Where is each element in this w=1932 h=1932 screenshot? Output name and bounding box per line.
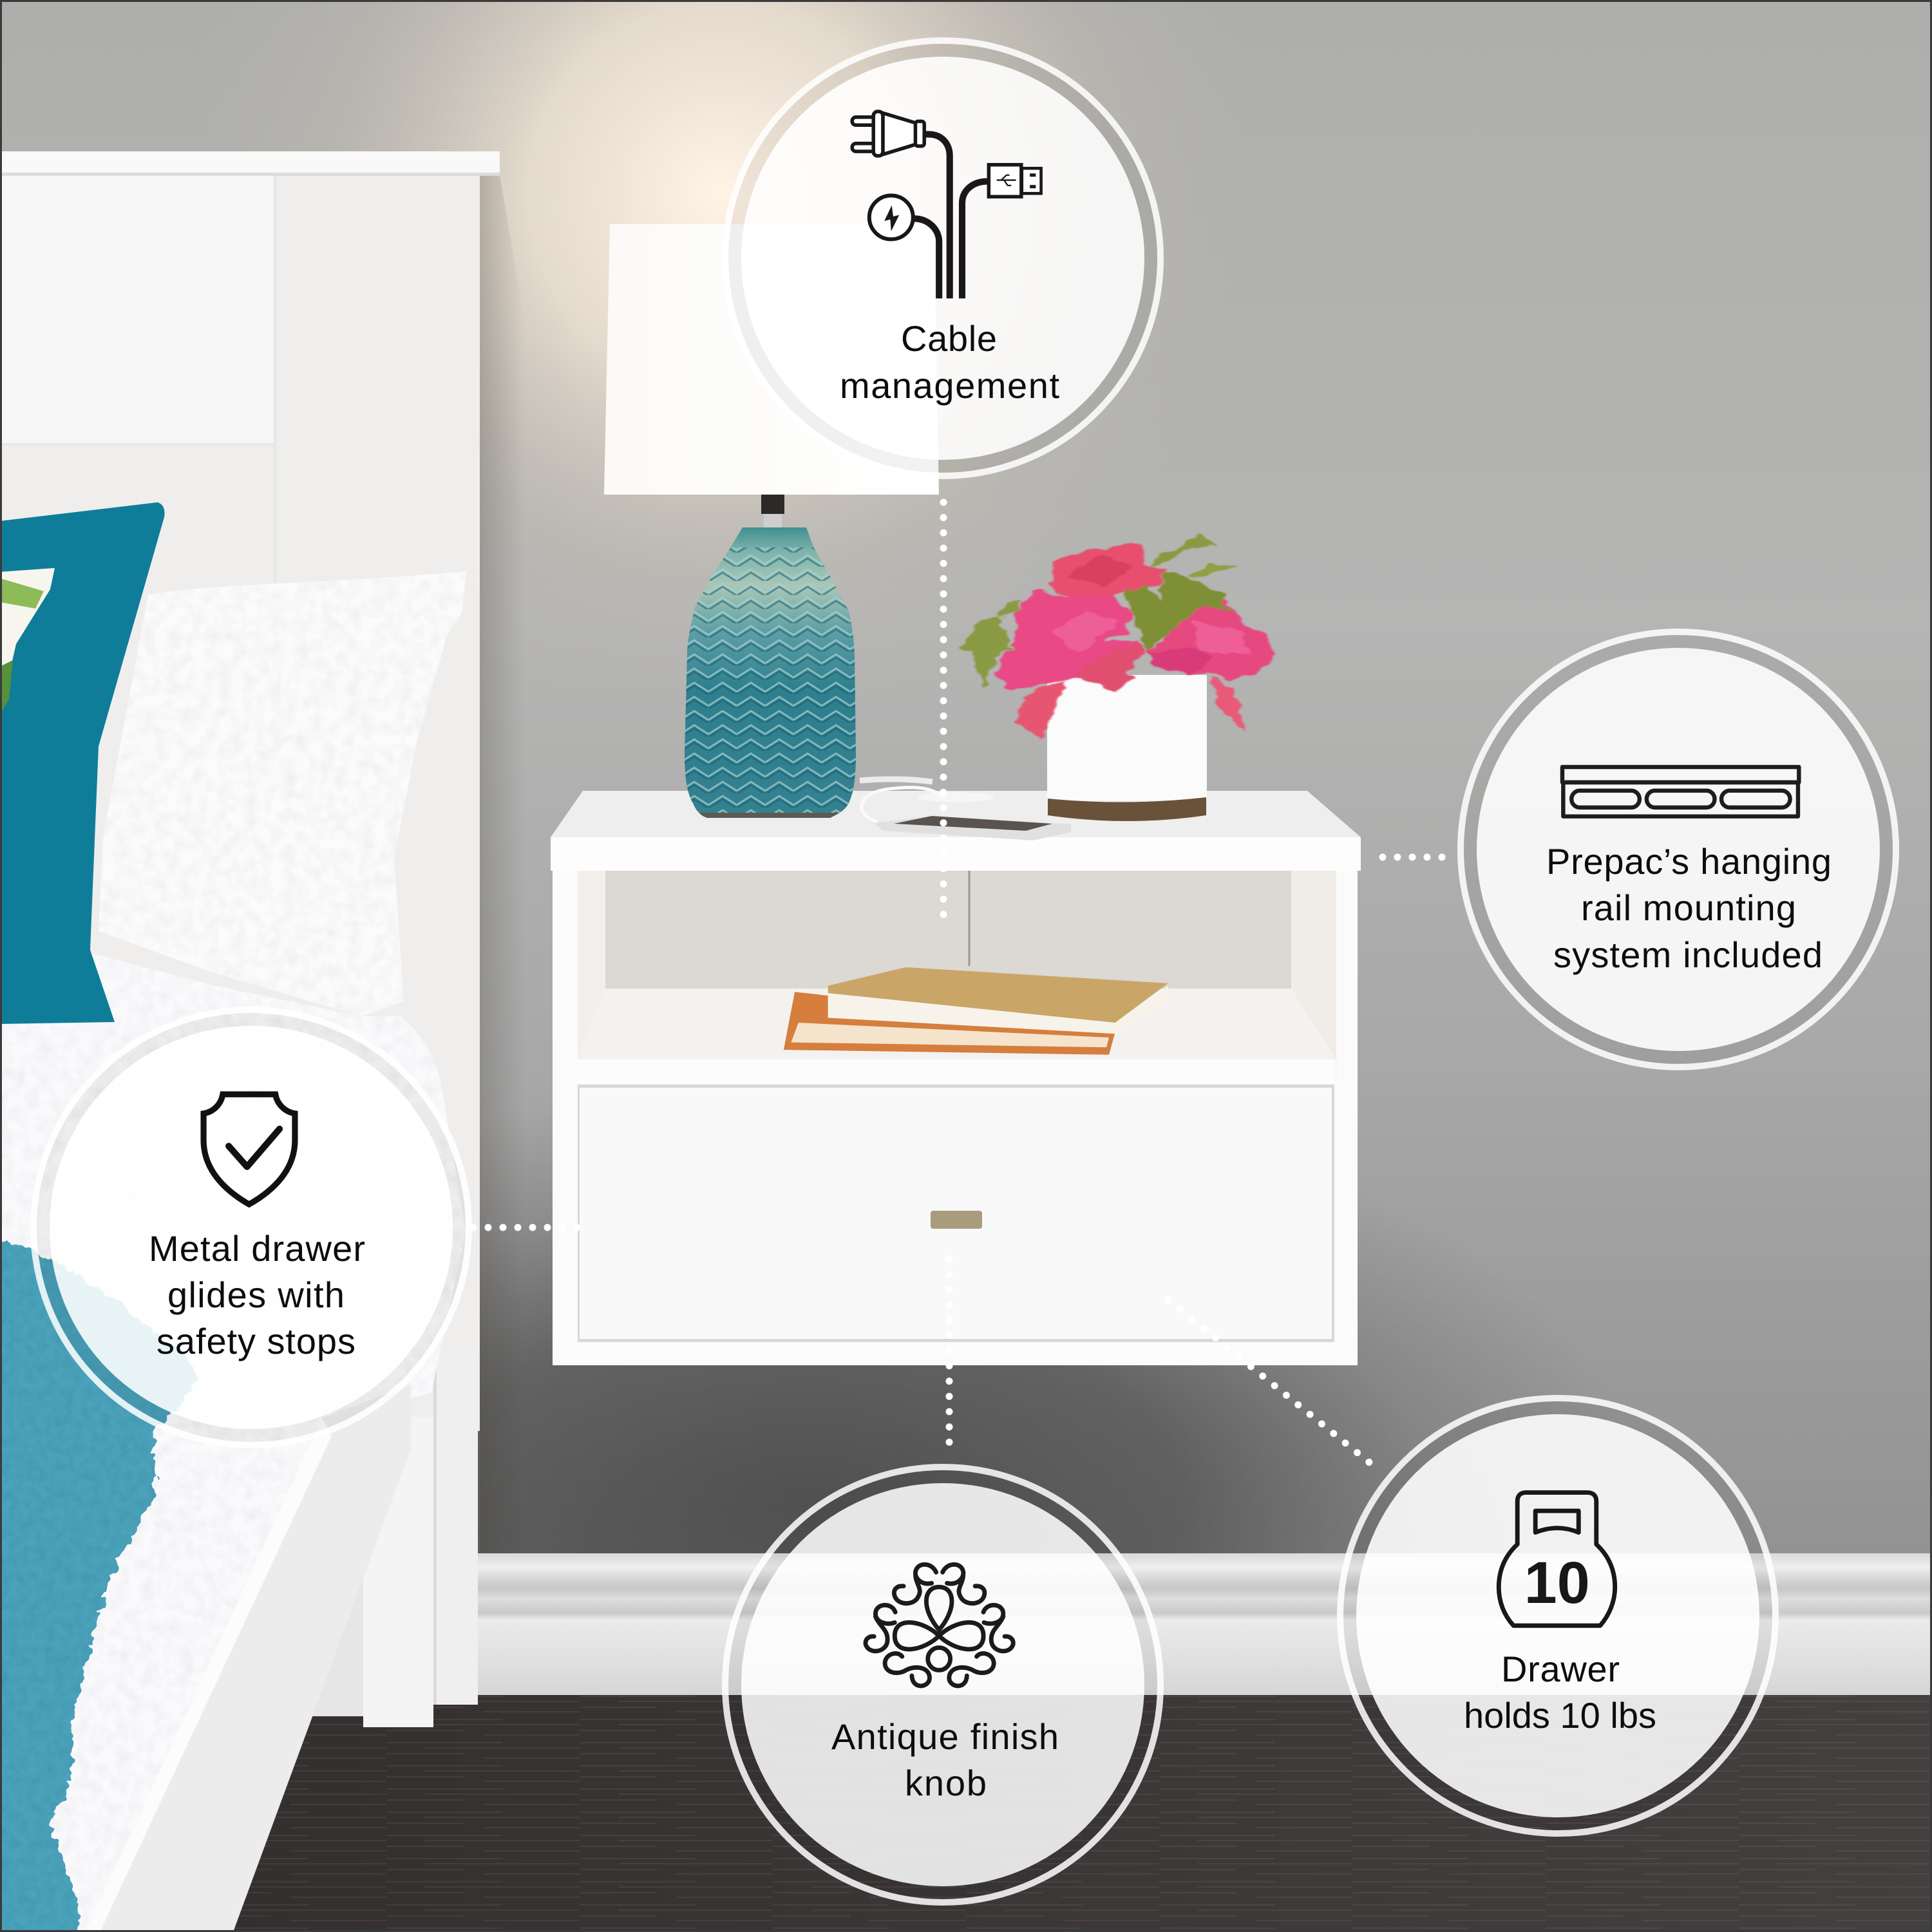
text: drawer weight: Drawer bbox=[1501, 1649, 1620, 1689]
text: drawer weight: holds 10 lbs bbox=[1464, 1695, 1656, 1736]
flower pot bbox=[1047, 675, 1207, 821]
dotted connector: knob bbox=[945, 1259, 953, 1444]
nightstand bbox=[551, 791, 1361, 1365]
text: hanging rail bbox=[1546, 841, 1832, 975]
text: antique finish knob: knob bbox=[905, 1763, 987, 1803]
panel: metal drawer glides bbox=[33, 1010, 469, 1445]
teal throw blanket bbox=[0, 1240, 200, 1932]
dotted connector: hanging rail bbox=[1383, 854, 1457, 860]
text: antique finish knob: Antique finish bbox=[831, 1716, 1059, 1757]
bed post bbox=[312, 1352, 478, 1727]
nightstand body bbox=[553, 871, 1358, 1365]
bed headboard bbox=[0, 151, 500, 1431]
drawer bbox=[578, 1084, 1334, 1342]
wood floor bbox=[0, 1695, 1932, 1932]
books bbox=[784, 967, 1168, 1055]
phone and charging cable bbox=[860, 779, 1071, 840]
text: metal drawer glides: glides with bbox=[167, 1274, 345, 1315]
text: metal drawer glides: Metal drawer bbox=[149, 1228, 365, 1269]
drawer knob bbox=[931, 1211, 982, 1229]
icon: kettlebell 10: 10 bbox=[1524, 1550, 1590, 1616]
dotted connector: drawer glides bbox=[473, 1224, 578, 1231]
lamp neck bbox=[761, 495, 784, 529]
panel: hanging rail bbox=[1461, 632, 1896, 1067]
panel: cable management bbox=[725, 41, 1160, 476]
lamp vase bbox=[676, 527, 863, 821]
text: cable management bbox=[840, 318, 1059, 406]
panel: antique finish knob bbox=[725, 1467, 1160, 1902]
nightstand top front edge bbox=[551, 837, 1361, 871]
bed side rail bbox=[86, 1385, 411, 1932]
lamp shade bbox=[604, 224, 939, 495]
text: hanging rail: system included bbox=[1553, 934, 1823, 975]
text: cable management: management bbox=[840, 365, 1059, 406]
text: hanging rail: Prepac’s hanging bbox=[1546, 841, 1832, 882]
text: metal drawer glides bbox=[149, 1228, 365, 1361]
baseboard bbox=[477, 1553, 1932, 1695]
pillow print bbox=[0, 568, 55, 715]
text: drawer weight bbox=[1464, 1649, 1656, 1736]
teal pillow bbox=[0, 502, 165, 1024]
icon: shield with check bbox=[204, 1094, 295, 1204]
open shelf interior bbox=[577, 871, 1336, 1084]
text: hanging rail: rail mounting bbox=[1581, 887, 1796, 928]
text: antique finish knob bbox=[831, 1716, 1059, 1803]
icon: cables and plugs bbox=[852, 111, 1041, 298]
text: metal drawer glides: safety stops bbox=[156, 1321, 355, 1361]
bedding bbox=[0, 953, 466, 1932]
lamp bbox=[604, 224, 939, 821]
dotted connector: drawer weight bbox=[1168, 1300, 1371, 1464]
icon: mounting rail bbox=[1562, 767, 1799, 817]
nightstand top bbox=[551, 791, 1361, 837]
icon: ornamental knob bbox=[866, 1564, 1013, 1686]
white pillow bbox=[99, 571, 466, 1016]
flowers bbox=[960, 535, 1276, 741]
icon: kettlebell 10 bbox=[1499, 1493, 1615, 1625]
text: cable management: Cable bbox=[901, 318, 997, 359]
dotted connector: cable management bbox=[940, 502, 947, 921]
panel: drawer weight bbox=[1340, 1398, 1776, 1833]
